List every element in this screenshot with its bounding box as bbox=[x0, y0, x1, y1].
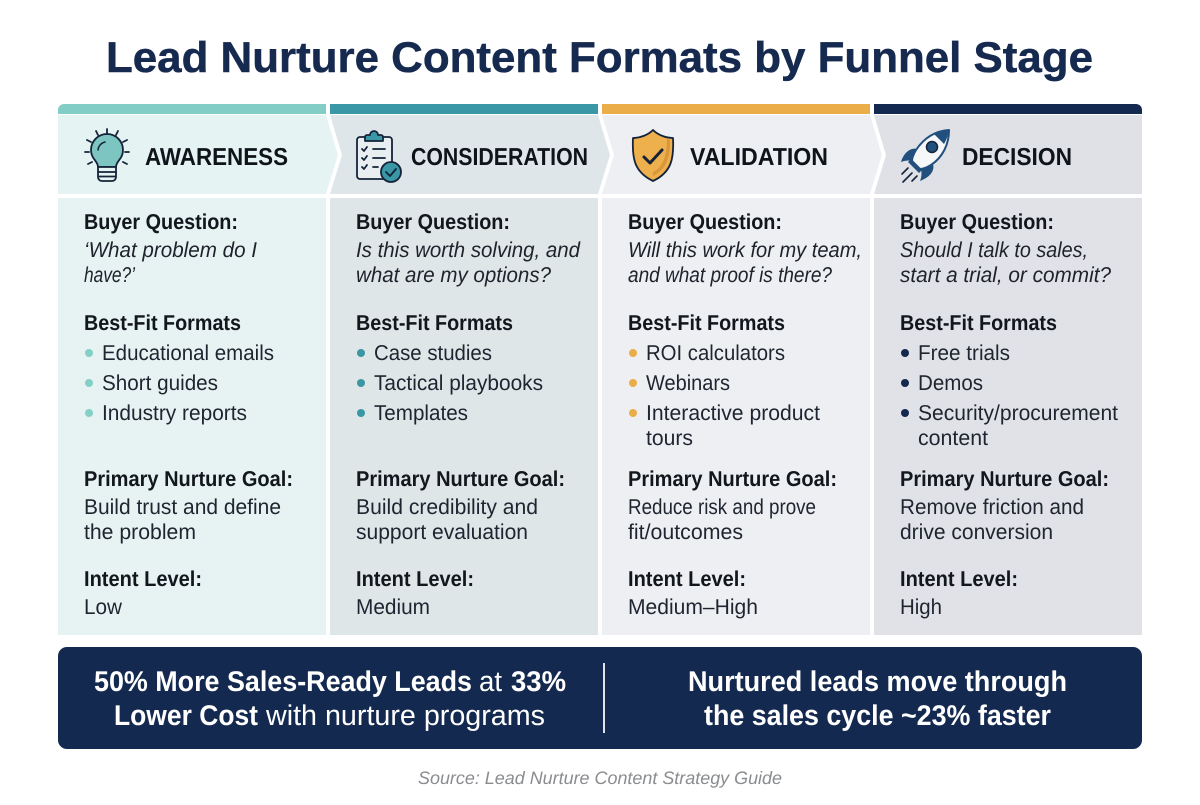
validation heading: VALIDATION bbox=[690, 144, 828, 171]
consideration formats: Templates bbox=[374, 401, 468, 425]
stat: sales-ready leads bbox=[94, 666, 566, 732]
panel: awareness bbox=[58, 104, 338, 635]
validation buyer question: Buyer Question: bbox=[628, 210, 782, 234]
decision buyer question: start a trial, or commit? bbox=[900, 263, 1111, 287]
validation goal: Primary Nurture Goal: bbox=[628, 467, 837, 491]
icon: shield bbox=[633, 130, 673, 181]
consideration top bar bbox=[330, 104, 598, 114]
validation formats: Interactive product bbox=[646, 401, 820, 425]
panel: consideration bbox=[330, 104, 610, 635]
decision intent bbox=[900, 567, 1018, 619]
consideration formats: Case studies bbox=[374, 341, 492, 365]
decision heading: DECISION bbox=[962, 144, 1072, 171]
validation buyer question: and what proof is there? bbox=[628, 263, 832, 287]
icon: light bulb bbox=[85, 129, 129, 181]
banner background bbox=[58, 647, 1142, 749]
stat: sales-ready leads: Lower Cost bbox=[114, 700, 258, 732]
consideration goal bbox=[356, 467, 565, 544]
awareness top bar bbox=[58, 104, 326, 114]
icon: clipboard bbox=[357, 131, 401, 182]
decision formats: Free trials bbox=[918, 341, 1010, 365]
awareness goal: the problem bbox=[84, 520, 196, 544]
consideration buyer question: what are my options? bbox=[356, 263, 551, 287]
validation header bbox=[602, 115, 882, 194]
consideration intent: Medium bbox=[356, 595, 430, 619]
consideration intent bbox=[356, 567, 474, 619]
validation formats: ROI calculators bbox=[646, 341, 785, 365]
stat: faster sales cycle bbox=[688, 666, 1067, 732]
decision formats: Security/procurement bbox=[918, 401, 1118, 425]
awareness formats bbox=[84, 311, 274, 425]
stat: sales-ready leads: 50% More Sales-Ready Leads bbox=[94, 666, 472, 698]
decision buyer question: Buyer Question: bbox=[900, 210, 1054, 234]
consideration goal: Build credibility and bbox=[356, 495, 538, 519]
awareness buyer question: have?’ bbox=[84, 263, 136, 287]
validation body bbox=[602, 198, 870, 635]
validation goal bbox=[628, 467, 837, 544]
decision intent: High bbox=[900, 595, 942, 619]
consideration formats: Tactical playbooks bbox=[374, 371, 543, 395]
consideration header bbox=[330, 115, 610, 194]
awareness formats: Short guides bbox=[102, 371, 218, 395]
title: Lead Nurture Content Formats by Funnel Stage bbox=[106, 34, 1093, 82]
consideration goal: support evaluation bbox=[356, 520, 528, 544]
validation buyer question bbox=[628, 210, 862, 287]
awareness intent: Low bbox=[84, 595, 122, 619]
awareness buyer question bbox=[84, 210, 257, 287]
panel: validation bbox=[602, 104, 882, 635]
awareness buyer question: ‘What problem do I bbox=[84, 238, 257, 262]
decision formats bbox=[900, 311, 1118, 450]
validation formats bbox=[628, 311, 820, 450]
consideration buyer question: Buyer Question: bbox=[356, 210, 510, 234]
decision goal: Primary Nurture Goal: bbox=[900, 467, 1109, 491]
decision formats: Demos bbox=[918, 371, 983, 395]
awareness heading: AWARENESS bbox=[145, 144, 288, 171]
awareness intent bbox=[84, 567, 202, 619]
consideration formats bbox=[356, 311, 543, 425]
decision body bbox=[874, 198, 1142, 635]
validation intent: Intent Level: bbox=[628, 567, 746, 591]
decision intent: Intent Level: bbox=[900, 567, 1018, 591]
stat: sales-ready leads: at bbox=[479, 666, 502, 698]
decision goal: drive conversion bbox=[900, 520, 1053, 544]
awareness intent: Intent Level: bbox=[84, 567, 202, 591]
validation formats: Best-Fit Formats bbox=[628, 311, 785, 335]
awareness goal bbox=[84, 467, 293, 544]
consideration buyer question: Is this worth solving, and bbox=[356, 238, 581, 262]
source note: Source: Lead Nurture Content Strategy Guide bbox=[418, 768, 782, 788]
decision goal bbox=[900, 467, 1109, 544]
awareness body bbox=[58, 198, 326, 635]
stat: sales-ready leads: with nurture programs bbox=[265, 700, 545, 732]
stat: faster sales cycle: Nurtured leads move through bbox=[688, 666, 1067, 698]
icon: rocket bbox=[901, 130, 949, 182]
validation top bar bbox=[602, 104, 870, 114]
awareness formats: Best-Fit Formats bbox=[84, 311, 241, 335]
validation intent: Medium–High bbox=[628, 595, 758, 619]
consideration intent: Intent Level: bbox=[356, 567, 474, 591]
decision buyer question: Should I talk to sales, bbox=[900, 238, 1088, 262]
validation formats: tours bbox=[646, 426, 693, 450]
decision buyer question bbox=[900, 210, 1111, 287]
decision top bar bbox=[874, 104, 1142, 114]
consideration heading: CONSIDERATION bbox=[411, 144, 588, 171]
awareness formats: Educational emails bbox=[102, 341, 274, 365]
awareness header bbox=[58, 115, 338, 194]
validation goal: Reduce risk and prove bbox=[628, 495, 816, 519]
stat: faster sales cycle: the sales cycle ~23% faster bbox=[704, 700, 1051, 732]
awareness buyer question: Buyer Question: bbox=[84, 210, 238, 234]
decision goal: Remove friction and bbox=[900, 495, 1084, 519]
decision formats: content bbox=[918, 426, 988, 450]
consideration body bbox=[330, 198, 598, 635]
validation buyer question: Will this work for my team, bbox=[628, 238, 862, 262]
decision formats: Best-Fit Formats bbox=[900, 311, 1057, 335]
consideration formats: Best-Fit Formats bbox=[356, 311, 513, 335]
awareness goal: Build trust and define bbox=[84, 495, 281, 519]
decision header bbox=[874, 115, 1142, 194]
consideration buyer question bbox=[356, 210, 581, 287]
awareness goal: Primary Nurture Goal: bbox=[84, 467, 293, 491]
callout banner bbox=[58, 647, 1142, 749]
stat: sales-ready leads: 33% bbox=[511, 666, 566, 698]
validation formats: Webinars bbox=[646, 371, 730, 395]
validation goal: fit/outcomes bbox=[628, 520, 743, 544]
awareness formats: Industry reports bbox=[102, 401, 247, 425]
panel: decision bbox=[874, 104, 1142, 635]
consideration goal: Primary Nurture Goal: bbox=[356, 467, 565, 491]
validation intent bbox=[628, 567, 758, 619]
